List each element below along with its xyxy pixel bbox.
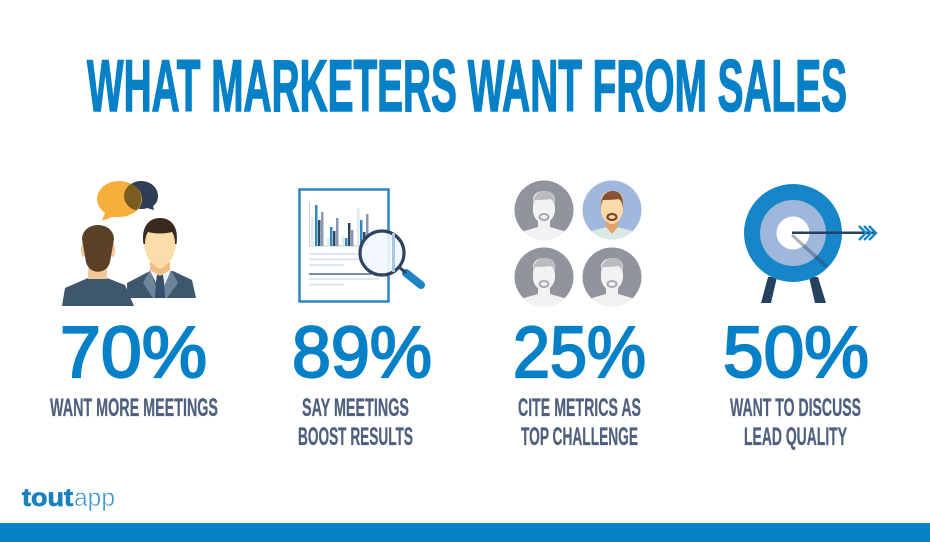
label: say meetings boost results: BOOST RESULTS	[298, 423, 413, 451]
icon: two businessmen talking	[62, 181, 196, 306]
portrait: grey bottom left	[514, 247, 574, 309]
label: want to discuss lead quality: LEAD QUALITY	[744, 423, 847, 451]
logo: toutapp	[22, 484, 115, 512]
logo: toutapp: app	[74, 484, 115, 512]
label: say meetings boost results	[298, 394, 413, 451]
stat: 70%: 70%	[60, 313, 207, 393]
label: cite metrics as top challenge: CITE METRICS AS	[518, 394, 641, 422]
portrait: grey bottom right	[582, 247, 642, 309]
logo: toutapp: tout	[22, 484, 74, 512]
icon: report with magnifying glass	[300, 190, 421, 302]
stat: 89%: 89%	[292, 313, 432, 393]
portrait: grey top left	[514, 180, 574, 242]
label: want more meetings: WANT MORE MEETINGS	[50, 394, 218, 422]
footer bar	[0, 523, 930, 542]
label: cite metrics as top challenge: TOP CHALLENGE	[521, 423, 638, 451]
label: say meetings boost results: SAY MEETINGS	[302, 394, 409, 422]
portrait: coloured top right	[582, 180, 642, 242]
stat: 50%: 50%	[723, 313, 869, 393]
icon: target with arrow	[744, 184, 876, 303]
icon: four portraits, one highlighted	[514, 180, 642, 309]
label: cite metrics as top challenge	[518, 394, 641, 451]
stat: 25%: 25%	[513, 313, 646, 393]
label: want to discuss lead quality	[730, 394, 861, 451]
